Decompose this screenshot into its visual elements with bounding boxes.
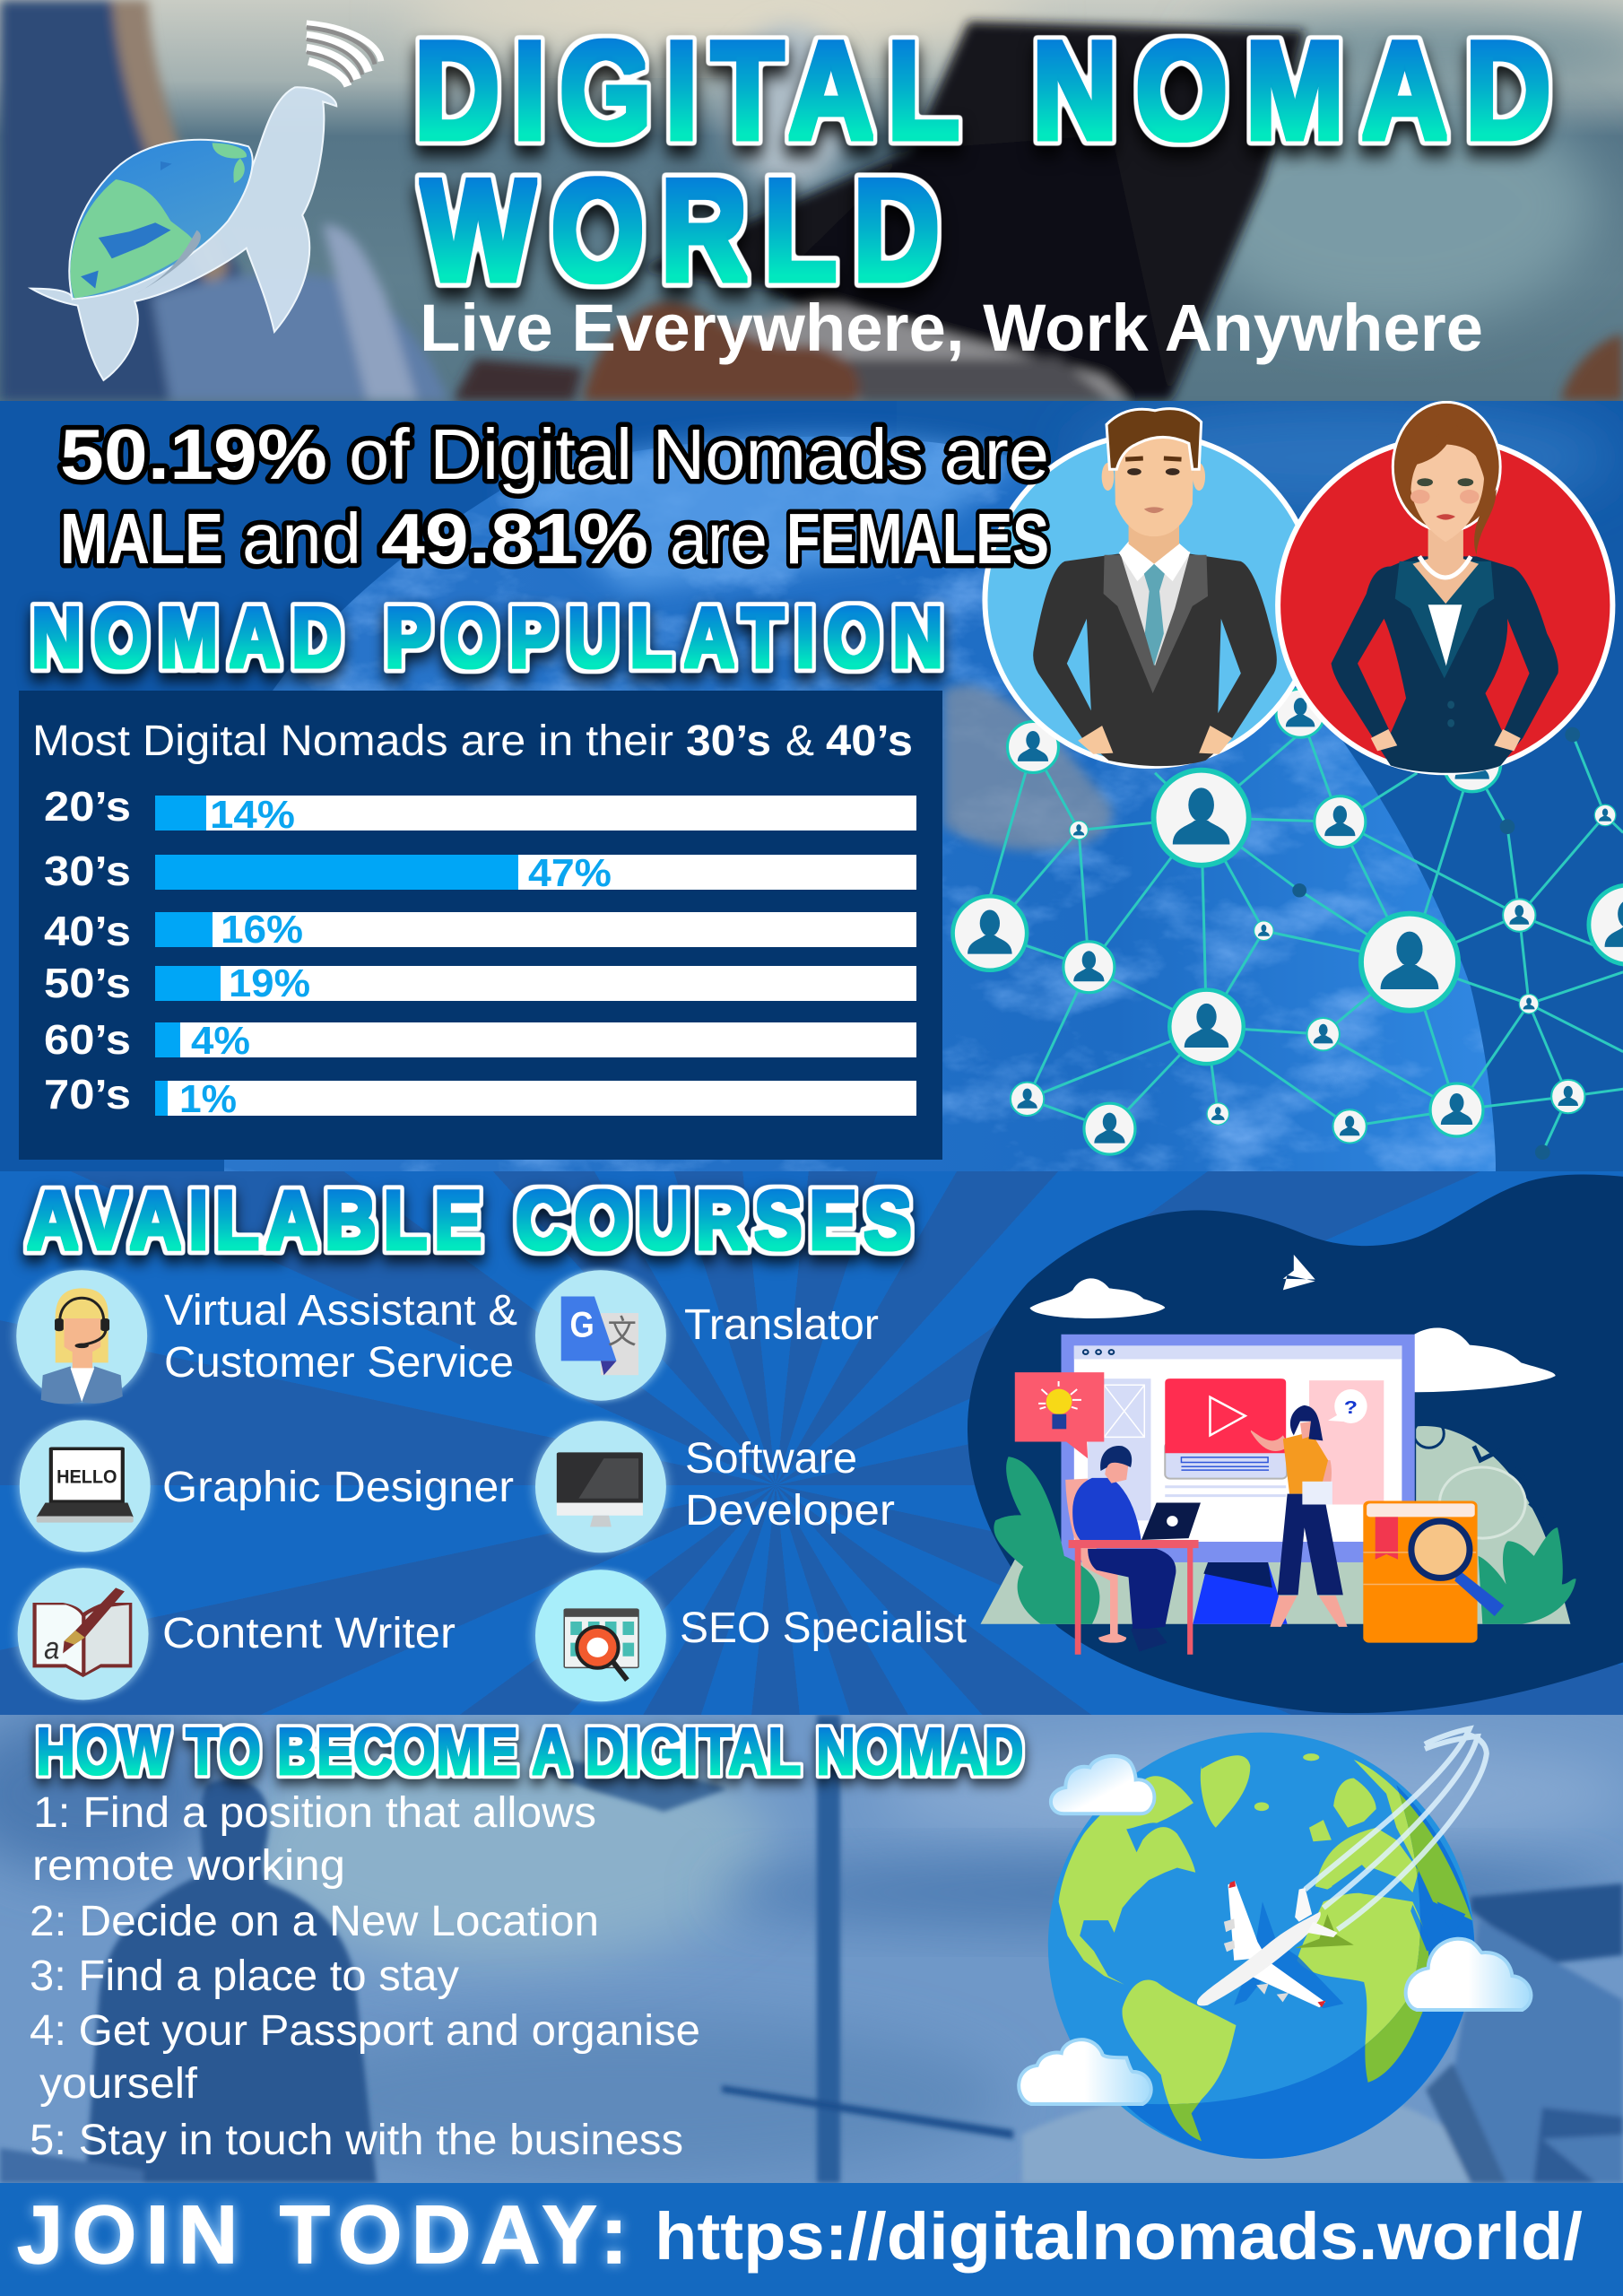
- panel: how to become a digital nomad: [0, 1715, 1623, 2183]
- icon: seo specialist: [535, 1570, 666, 1701]
- bar: 60's: 60’s: [44, 1016, 131, 1063]
- question bubble: ?: [1344, 1396, 1358, 1417]
- bar: 30's: 30’s: [44, 848, 131, 894]
- bar: 70's: 1%: [179, 1077, 237, 1121]
- course labels: Content Writer: [162, 1610, 456, 1657]
- panel: nomad population: [0, 401, 1623, 1171]
- icon: content writer: [18, 1568, 149, 1700]
- tagline: Live Everywhere, Work Anywhere: [420, 291, 1483, 365]
- book with magnifier: [1363, 1501, 1504, 1643]
- steps list: 5: Stay in touch with the business: [30, 2117, 683, 2164]
- icon: graphic designer: [20, 1420, 151, 1552]
- illustration: online learning: [968, 1174, 1623, 1713]
- background earth: [224, 401, 1623, 1171]
- man at laptop: [1065, 1446, 1201, 1655]
- gender statement: 49.81%: [381, 499, 648, 578]
- bar: 40's: 16%: [221, 908, 303, 952]
- icon: content writer: a: [44, 1631, 59, 1665]
- course labels: Customer Service: [164, 1339, 514, 1387]
- bar: 50's: [44, 960, 916, 1006]
- steps list: 2: Decide on a New Location: [30, 1898, 599, 1945]
- icon: translator: G: [570, 1305, 595, 1344]
- course labels: [162, 1287, 967, 1657]
- bar: 20's: [44, 783, 916, 837]
- chart title: 40’s: [826, 718, 913, 765]
- question bubble: [1328, 1389, 1367, 1423]
- chart title: Most Digital Nomads are in their: [32, 718, 673, 765]
- title: DIGITAL: [414, 13, 973, 168]
- woman presenting: [1251, 1405, 1348, 1627]
- avatar: female: [1278, 402, 1612, 773]
- avatar: male: [985, 409, 1316, 766]
- chart title: [32, 718, 913, 765]
- illustration: globe with plane: [1019, 1729, 1531, 2159]
- course labels: Translator: [684, 1301, 879, 1349]
- bar: 50's: 19%: [229, 961, 310, 1005]
- background photo: laptop by the sea: [0, 0, 1623, 401]
- leaves: [994, 1457, 1576, 1624]
- heading: nomad population: NOMAD POPULATION: [31, 591, 955, 685]
- chart title: 30’s: [686, 718, 771, 765]
- steps list: 1: Find a position that allows: [33, 1789, 596, 1837]
- gender statement: FEMALES: [786, 499, 1049, 578]
- gender statement: of Digital Nomads are: [349, 414, 1049, 494]
- bar: 20's: 20’s: [44, 783, 131, 830]
- hill and gears: [980, 1420, 1570, 1624]
- course labels: Developer: [685, 1487, 895, 1535]
- call to action: JOIN TODAY:: [17, 2189, 637, 2281]
- steps list: remote working: [32, 1842, 345, 1890]
- turtle body: [31, 87, 336, 380]
- steps list: [30, 1789, 700, 2164]
- clouds: [1019, 1756, 1531, 2104]
- gender statement: MALE: [60, 499, 223, 578]
- background photo: man at airport: [0, 1713, 1623, 2183]
- bar: 30's: [44, 848, 916, 895]
- people network: [953, 402, 1623, 1160]
- bar: 60's: 4%: [191, 1019, 250, 1063]
- steps list: 3: Find a place to stay: [30, 1952, 459, 2000]
- title: [414, 13, 1569, 311]
- course list: [16, 1270, 967, 1701]
- bar: 30's: 47%: [528, 851, 612, 895]
- bar: 60's: [44, 1016, 916, 1063]
- course icons: [16, 1270, 666, 1701]
- course labels: Graphic Designer: [162, 1464, 514, 1511]
- steps list: 4: Get your Passport and organise: [30, 2007, 700, 2055]
- video player: [1165, 1378, 1287, 1479]
- panel: available courses: [0, 1171, 1623, 1715]
- globe: [1048, 1733, 1474, 2159]
- bar: 70's: [44, 1071, 916, 1121]
- plane: [1197, 1881, 1354, 2008]
- contrails: [1305, 1729, 1487, 1929]
- shell globe: [69, 140, 253, 299]
- network nodes: [953, 689, 1623, 1160]
- bar: 40's: 40’s: [44, 908, 131, 954]
- bar: 20's: 14%: [210, 793, 295, 837]
- panel: age chart: [19, 691, 942, 1160]
- monitor: [1061, 1335, 1415, 1624]
- icon: software developer: [535, 1421, 666, 1552]
- wifi signal: [307, 23, 381, 86]
- title: WORLD: [421, 151, 956, 311]
- blob background: [968, 1174, 1623, 1713]
- steps list: yourself: [39, 2060, 198, 2108]
- icon: virtual assistant: [16, 1270, 147, 1404]
- logo: turtle with globe shell and wifi: [31, 23, 381, 380]
- heading: available courses: AVAILABLE COURSES: [27, 1175, 918, 1266]
- title: NOMAD: [1032, 13, 1569, 168]
- panel: header: [0, 0, 1623, 401]
- bar: 50's: 50’s: [44, 960, 131, 1006]
- gender statement: and: [242, 499, 361, 578]
- gender statement: are: [670, 499, 768, 578]
- idea bubble: [1015, 1372, 1104, 1458]
- gender statement: 50.19%: [60, 414, 327, 494]
- heading: how to become: HOW TO BECOME A DIGITAL NOMAD: [36, 1716, 1024, 1788]
- panel: join today footer: [0, 2183, 1623, 2296]
- gender statement: [60, 414, 1049, 578]
- course labels: Software: [685, 1435, 857, 1483]
- icon: translator: [535, 1270, 666, 1401]
- bar: 40's: [44, 908, 916, 954]
- network links: [990, 713, 1623, 1152]
- bar: 70's: 70’s: [44, 1071, 131, 1118]
- website url: https://digitalnomads.world/: [655, 2199, 1583, 2274]
- icon: graphic designer: HELLO: [56, 1466, 117, 1488]
- course labels: SEO Specialist: [680, 1605, 967, 1652]
- clouds and paper plane: [1030, 1255, 1556, 1392]
- chart title: &: [785, 718, 814, 765]
- icon: translator: 文: [608, 1315, 637, 1351]
- course labels: Virtual Assistant &: [164, 1287, 517, 1335]
